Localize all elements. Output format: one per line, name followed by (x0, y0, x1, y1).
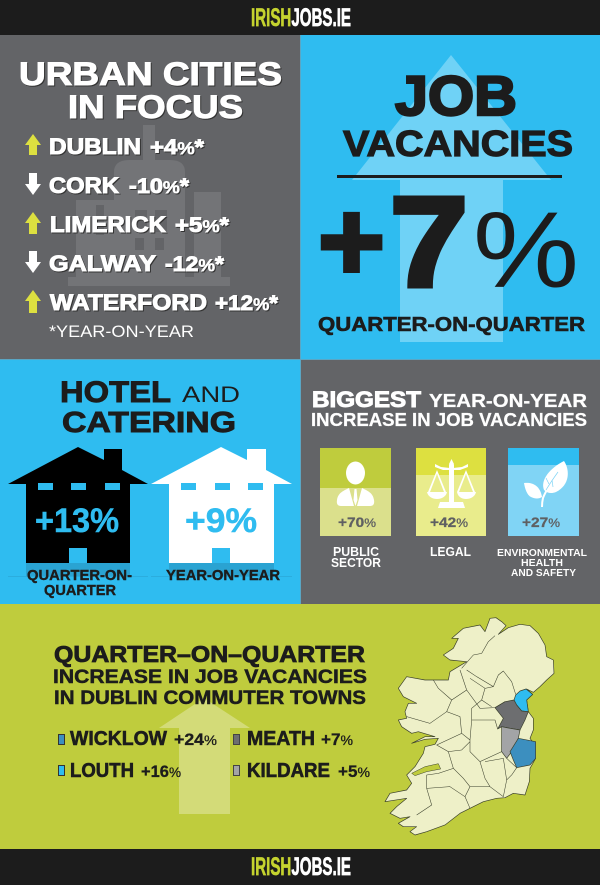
icon: leaf (524, 461, 568, 507)
heading: vacancies: VACANCIES (343, 123, 573, 164)
heading: hotel and catering: CATERING (62, 407, 236, 439)
row: Dublin: +4%* (150, 136, 205, 159)
legend: Meath: MEATH (247, 728, 315, 750)
arrow background (352, 55, 551, 342)
card: public sector: +70% (338, 514, 376, 530)
panel: job vacancies (301, 35, 600, 359)
heading: urban cities in focus: IN FOCUS (68, 89, 243, 125)
top bar (0, 0, 600, 35)
card: public sector (320, 448, 391, 536)
row: Galway: GALWAY (49, 251, 156, 276)
row: Cork (25, 173, 190, 198)
heading: quarter-on-quarter commuter towns (53, 641, 367, 709)
heading: hotel and catering (60, 376, 240, 439)
row: Limerick: +5%* (175, 214, 230, 237)
logo: IRISHJOBS.IE (251, 4, 351, 32)
county: Louth (514, 689, 533, 712)
house shadows (8, 563, 292, 577)
arrow background (159, 698, 250, 814)
label: environmental health and safety (497, 547, 588, 579)
legend: Louth: +16% (141, 762, 181, 781)
row: Cork: -10%* (129, 175, 190, 198)
legend (58, 728, 370, 782)
label: quarter-on-quarter (27, 567, 132, 599)
row: Dublin (25, 134, 205, 159)
legend: Wicklow: +24% (174, 730, 217, 749)
building silhouette (68, 125, 230, 286)
legend: Kildare: KILDARE (247, 760, 330, 782)
card: environmental health and safety: +27% (522, 514, 560, 530)
icon: person (337, 462, 374, 506)
legend: Meath: +7% (321, 730, 353, 749)
house: quarter-on-quarter (8, 447, 148, 563)
card: legal (416, 448, 486, 536)
row: Limerick: LIMERICK (50, 212, 166, 237)
label: quarter-on-quarter: QUARTER-ON-QUARTER (318, 314, 586, 336)
panel: hotel and catering (0, 360, 300, 604)
legend: Wicklow: WICKLOW (70, 728, 167, 750)
row: Waterford (25, 290, 279, 315)
heading: biggest year-on-year increase: BIGGEST (312, 387, 422, 412)
heading: urban cities in focus (19, 56, 282, 125)
heading: quarter-on-quarter commuter towns: QUARTER–ON–QUARTER (54, 641, 365, 667)
county: Kildare (502, 727, 520, 758)
label: year-on-year: YEAR-ON-YEAR (166, 567, 280, 584)
label: public sector: PUBLIC (333, 545, 379, 559)
label: legal: LEGAL (430, 545, 471, 559)
panel: commuter towns (0, 604, 600, 849)
house: year-on-year: +9% (185, 502, 257, 540)
footnote: *YEAR-ON-YEAR (49, 322, 194, 341)
heading: urban cities in focus: URBAN CITIES (19, 56, 282, 92)
figure: +7% (318, 171, 579, 314)
logo: IRISHJOBS.IE (251, 853, 351, 881)
legend: Wicklow (58, 728, 217, 750)
row: Waterford: +12%* (215, 292, 279, 315)
label: public sector: SECTOR (331, 556, 381, 570)
panel: urban cities (0, 35, 300, 359)
heading: quarter-on-quarter commuter towns: INCREASE IN JOB VACANCIES (53, 666, 367, 688)
label: quarter-on-quarter: QUARTER (44, 582, 116, 599)
house: year-on-year (151, 447, 292, 563)
map of Ireland (385, 618, 554, 835)
label: environmental health and safety: AND SAFETY (511, 567, 576, 579)
heading: biggest year-on-year increase: YEAR-ON-YEAR (429, 391, 587, 411)
row: Galway: -12%* (165, 253, 225, 276)
heading: quarter-on-quarter commuter towns: IN DUBLIN COMMUTER TOWNS (54, 687, 366, 709)
county: Wicklow (510, 738, 536, 768)
legend: Louth: LOUTH (70, 760, 134, 782)
legend: Kildare: +5% (338, 762, 370, 781)
row: Cork: CORK (49, 173, 119, 198)
label: environmental health and safety: ENVIRONMENTAL (497, 547, 588, 559)
bottom bar (0, 849, 600, 885)
label: public sector (331, 545, 381, 570)
row: Limerick (25, 212, 230, 237)
figure: +7%: 7 (390, 171, 468, 314)
house: quarter-on-quarter: +13% (35, 502, 119, 540)
icon: scales (427, 459, 476, 508)
legend: Kildare (234, 760, 370, 782)
heading: job: JOB (395, 64, 517, 127)
legend: Louth (58, 760, 181, 782)
row: Waterford: WATERFORD (50, 290, 207, 315)
label: quarter-on-quarter: QUARTER-ON- (27, 567, 132, 584)
row: Dublin: DUBLIN (49, 134, 141, 159)
heading: hotel and catering: HOTEL (60, 376, 171, 409)
figure: +7%: % (473, 189, 579, 310)
heading: biggest year-on-year increase: INCREASE IN JOB VACANCIES (311, 410, 587, 430)
row: Galway (25, 251, 225, 276)
city list (25, 134, 279, 315)
heading: biggest year-on-year increase (311, 387, 587, 430)
heading: hotel and catering: AND (182, 382, 240, 407)
panel: biggest increase (301, 360, 600, 604)
figure: +7%: + (318, 179, 385, 304)
card: legal: +42% (430, 514, 468, 530)
county: Meath (495, 700, 528, 730)
card: environmental health and safety (508, 448, 579, 536)
label: environmental health and safety: HEALTH (521, 557, 563, 569)
legend: Meath (234, 728, 353, 750)
